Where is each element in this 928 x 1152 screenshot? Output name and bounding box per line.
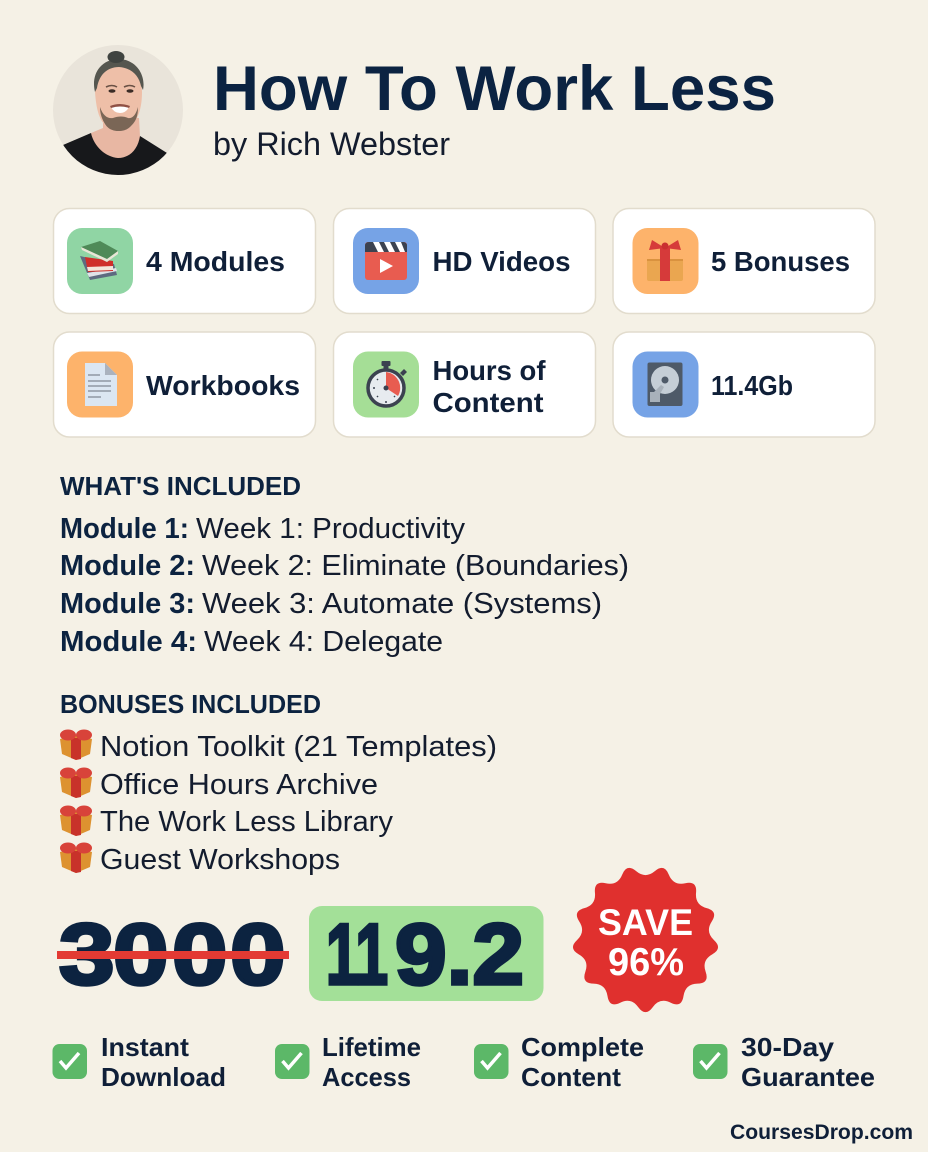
stat card: HD Videos: [334, 208, 596, 314]
feature: instant download: [52, 1032, 226, 1092]
label: Content: [432, 387, 544, 418]
new price: 11: [326, 907, 388, 1003]
module list: Week 2: Eliminate (Boundaries): [202, 550, 629, 582]
module list: Week 1: Productivity: [196, 513, 466, 545]
stat card: 11.4Gb: [613, 332, 875, 437]
old price struck through: 3000: [59, 906, 286, 1002]
subtitle: by Rich Webster: [213, 126, 450, 162]
feature: lifetime access: [275, 1032, 421, 1092]
module list: Module 1:: [60, 513, 189, 545]
feature: 30-day guarantee: 30-Day: [741, 1032, 835, 1062]
portrait photo of Rich Webster: [53, 45, 183, 180]
feature: 30-day guarantee: Guarantee: [741, 1062, 875, 1092]
feature: 30-day guarantee: [693, 1032, 875, 1092]
icon: gift box: [632, 228, 698, 294]
feature: complete content: Content: [521, 1062, 621, 1092]
new price: [309, 906, 544, 1003]
module list: Module 4:: [60, 626, 197, 658]
stat card: Workbooks: Workbooks: [146, 370, 300, 401]
stat card: 5 Bonuses: [613, 208, 875, 314]
icon: video clapperboard: [353, 228, 419, 294]
stat card: Workbooks: [54, 332, 316, 437]
icon: document: [67, 352, 133, 418]
stat card: 5 Bonuses: 5 Bonuses: [711, 246, 850, 277]
icon: gift emoji 3: [60, 806, 92, 836]
module list: Week 4: Delegate: [204, 626, 443, 658]
save badge: SAVE: [598, 902, 693, 943]
stat card: HD Videos: HD Videos: [432, 246, 570, 277]
icon: gift emoji 1: [60, 730, 92, 760]
bonus list: Guest Workshops: [100, 844, 340, 876]
icon: gift emoji 4: [60, 842, 92, 873]
icon: stack of books: [67, 228, 133, 294]
heading: what's included: WHAT'S INCLUDED: [60, 471, 301, 501]
title: How To Work Less: [213, 54, 776, 124]
feature: complete content: Complete: [521, 1032, 644, 1062]
stat card: 11.4Gb: 11.4Gb: [711, 370, 793, 401]
new price: 9.2: [395, 907, 524, 1003]
module list: Module 3:: [60, 588, 195, 620]
feature: instant download: Download: [101, 1062, 226, 1092]
icon: gift emoji 2: [60, 768, 92, 798]
stat card: 4 Modules: [54, 208, 316, 314]
save badge: [573, 868, 718, 1012]
bonus list: Office Hours Archive: [100, 769, 378, 801]
save badge: 96%: [608, 941, 684, 984]
heading: bonuses included: BONUSES INCLUDED: [60, 689, 321, 719]
feature: lifetime access: Access: [322, 1062, 411, 1092]
feature: instant download: Instant: [101, 1032, 189, 1062]
stat card: Hours of Content: [334, 332, 596, 437]
label: Hours of: [432, 355, 546, 386]
label: [432, 355, 546, 418]
module list: [60, 513, 629, 658]
bonus list: The Work Less Library: [100, 806, 393, 838]
icon: stopwatch: [353, 352, 419, 418]
stat card: 4 Modules: 4 Modules: [146, 246, 285, 277]
bonus list: [60, 730, 497, 876]
module list: Module 2:: [60, 550, 195, 582]
watermark: CoursesDrop.com: [730, 1121, 913, 1144]
icon: hard drive: [632, 352, 698, 418]
bonus list: Notion Toolkit (21 Templates): [100, 731, 497, 763]
module list: Week 3: Automate (Systems): [202, 588, 602, 620]
feature: complete content: [474, 1032, 644, 1092]
feature: lifetime access: Lifetime: [322, 1032, 421, 1062]
